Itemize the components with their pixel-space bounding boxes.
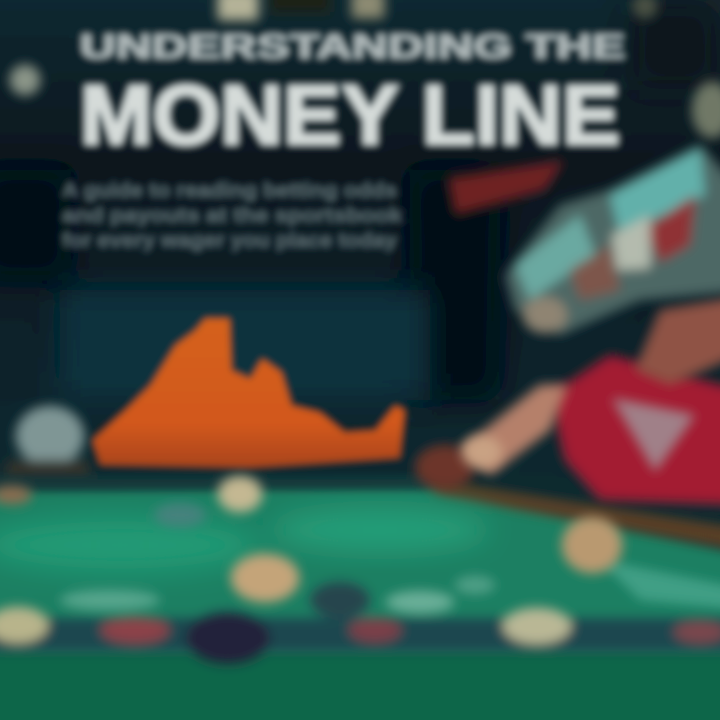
player: arm	[460, 385, 568, 475]
title: money line: MONEY LINE	[80, 68, 620, 162]
card fan	[505, 82, 720, 335]
title	[80, 28, 625, 162]
table	[0, 476, 720, 720]
top decorative figures	[10, 0, 657, 95]
subtitle text block: and payouts at the sportsbook	[62, 205, 403, 227]
chip row	[0, 476, 720, 664]
player: shirt emblem	[612, 398, 695, 472]
subtitle text block	[62, 180, 403, 252]
player: red shirt	[550, 355, 720, 505]
table felt	[0, 484, 720, 720]
red badge	[448, 160, 565, 215]
subtitle text block: A guide to reading betting odds	[62, 180, 397, 202]
grey figure	[5, 406, 90, 478]
table edge	[420, 478, 720, 552]
table foreground	[0, 652, 720, 720]
subtitle text block: for every wager you place today	[62, 230, 398, 252]
felt highlights	[0, 517, 260, 573]
player: raised arm	[635, 295, 720, 385]
player	[415, 295, 720, 505]
player: hand	[415, 445, 475, 489]
title: top line: UNDERSTANDING THE	[80, 28, 625, 66]
orange area chart	[92, 318, 405, 468]
